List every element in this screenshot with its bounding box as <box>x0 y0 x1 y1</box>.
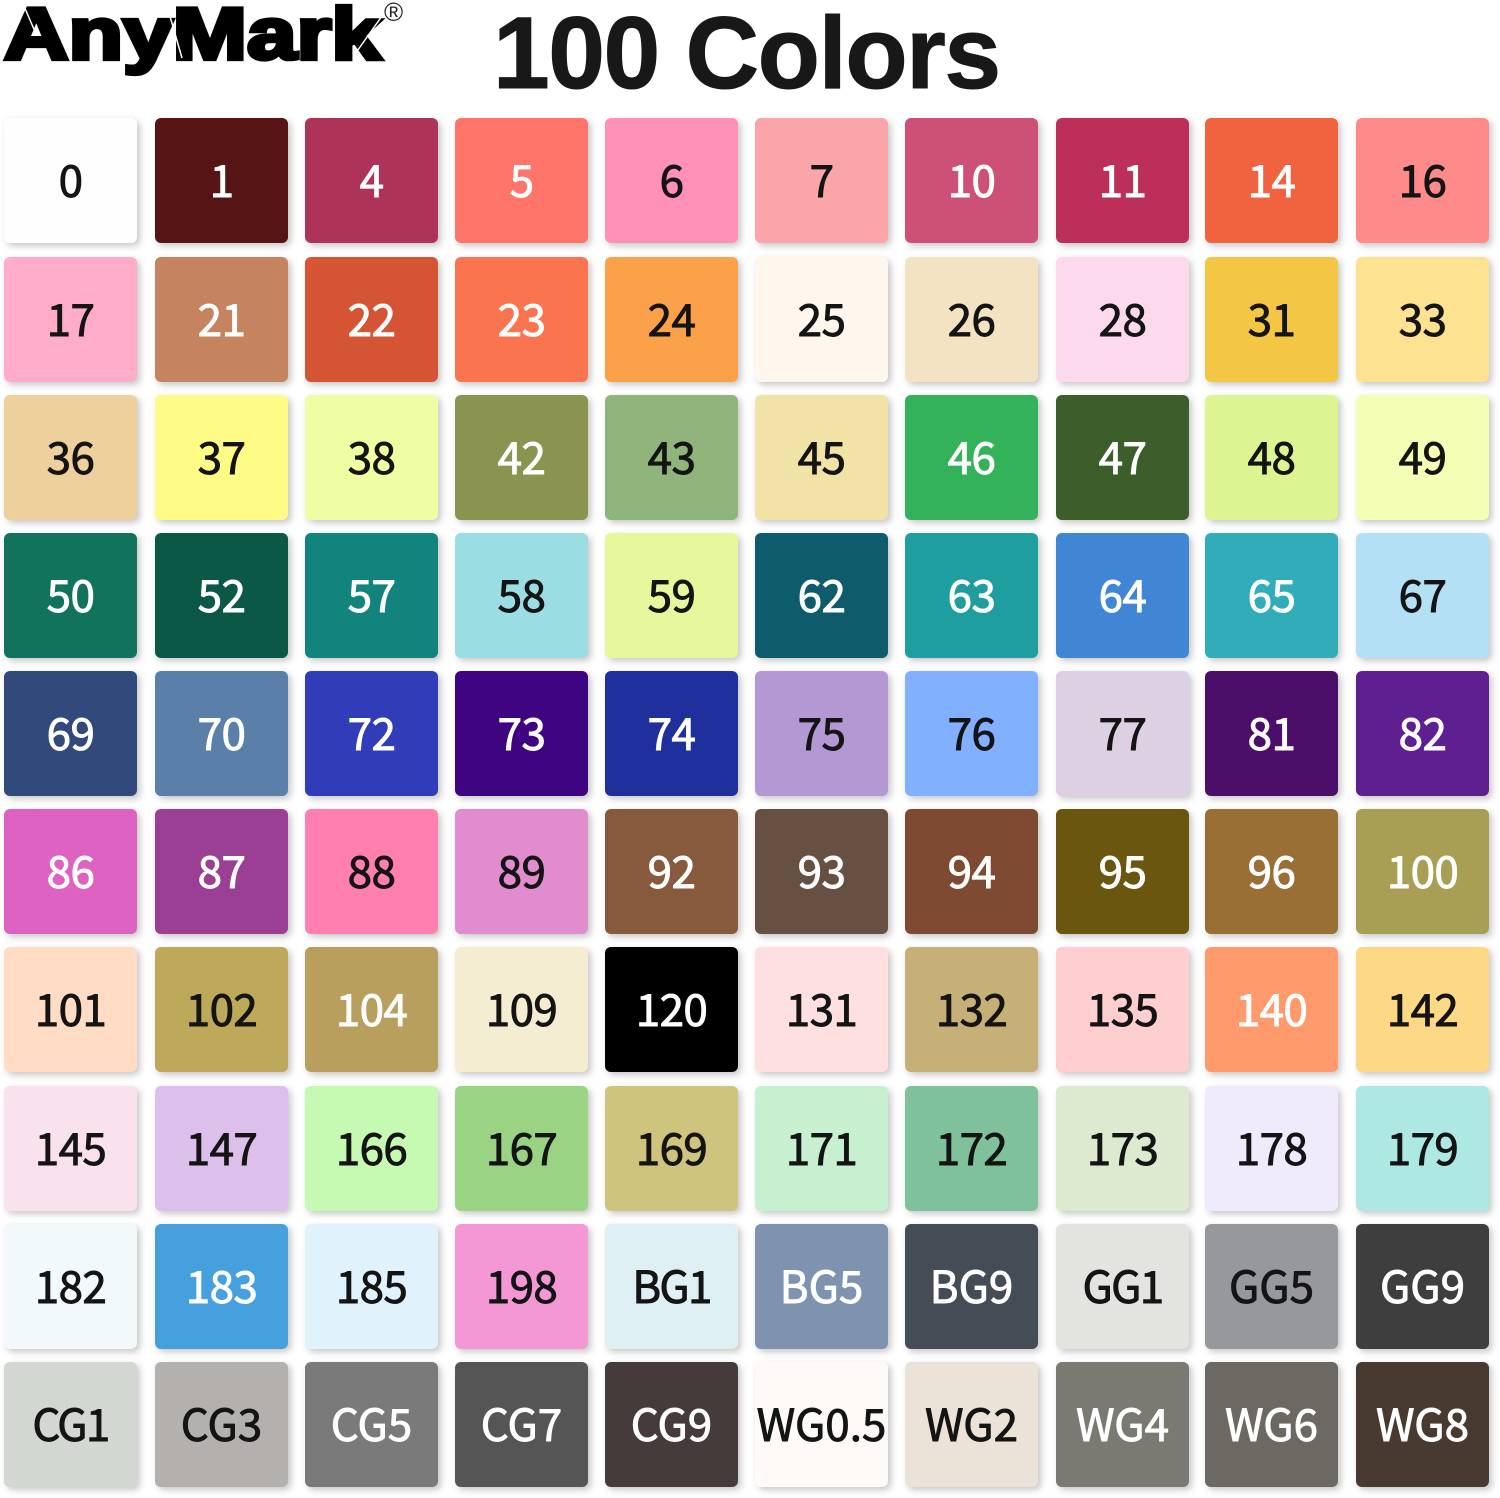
swatch 31 <box>1205 257 1338 382</box>
swatch 4: 4 <box>360 146 383 210</box>
swatch 14 <box>1205 118 1338 243</box>
swatch 69: 69 <box>47 699 94 763</box>
swatch 102 <box>155 947 288 1072</box>
swatch BG1 <box>605 1224 738 1349</box>
swatch 120 <box>605 947 738 1072</box>
swatch 49 <box>1356 395 1489 520</box>
swatch 24: 24 <box>648 285 695 349</box>
swatch 0: 0 <box>59 146 82 210</box>
swatch 132 <box>905 947 1038 1072</box>
swatch 104: 104 <box>336 975 407 1039</box>
swatch 131 <box>755 947 888 1072</box>
swatch 28 <box>1056 257 1189 382</box>
swatch 185 <box>305 1224 438 1349</box>
swatch 100 <box>1356 809 1489 934</box>
swatch 67 <box>1356 533 1489 658</box>
swatch 50: 50 <box>47 561 94 625</box>
swatch 65 <box>1205 533 1338 658</box>
swatch 46: 46 <box>948 423 995 487</box>
swatch 100: 100 <box>1387 837 1458 901</box>
swatch 95 <box>1056 809 1189 934</box>
swatch 86: 86 <box>47 837 94 901</box>
swatch 135 <box>1056 947 1189 1072</box>
swatch 179 <box>1356 1086 1489 1211</box>
swatch 169 <box>605 1086 738 1211</box>
swatch 22 <box>305 257 438 382</box>
swatch CG7 <box>455 1362 588 1487</box>
swatch CG9: CG9 <box>631 1390 712 1454</box>
swatch 93 <box>755 809 888 934</box>
swatch 65: 65 <box>1248 561 1295 625</box>
swatch 4 <box>305 118 438 243</box>
swatch 104 <box>305 947 438 1072</box>
swatch 37 <box>155 395 288 520</box>
swatch 58: 58 <box>498 561 545 625</box>
swatch 14: 14 <box>1248 146 1295 210</box>
swatch 88 <box>305 809 438 934</box>
swatch 23 <box>455 257 588 382</box>
swatch 140 <box>1205 947 1338 1072</box>
swatch 167 <box>455 1086 588 1211</box>
swatch 95: 95 <box>1099 837 1146 901</box>
swatch 1 <box>155 118 288 243</box>
swatch 10 <box>905 118 1038 243</box>
swatch 182: 182 <box>35 1252 106 1316</box>
swatch 96: 96 <box>1248 837 1295 901</box>
swatch 42: 42 <box>498 423 545 487</box>
swatch 59 <box>605 533 738 658</box>
swatch 76 <box>905 671 1038 796</box>
swatch 183: 183 <box>186 1252 257 1316</box>
swatch 142: 142 <box>1387 975 1458 1039</box>
swatch 67: 67 <box>1399 561 1446 625</box>
swatch 45: 45 <box>798 423 845 487</box>
swatch 145 <box>4 1086 137 1211</box>
swatch 183 <box>155 1224 288 1349</box>
swatch 173: 173 <box>1087 1114 1158 1178</box>
swatch 70 <box>155 671 288 796</box>
swatch 31: 31 <box>1248 285 1295 349</box>
swatch 52: 52 <box>198 561 245 625</box>
swatch 38 <box>305 395 438 520</box>
swatch 178: 178 <box>1236 1114 1307 1178</box>
swatch 17: 17 <box>47 285 94 349</box>
swatch BG5: BG5 <box>780 1252 863 1316</box>
swatch 75 <box>755 671 888 796</box>
swatch 47: 47 <box>1099 423 1146 487</box>
swatch 25: 25 <box>798 285 845 349</box>
swatch 28: 28 <box>1099 285 1146 349</box>
swatch WG8: WG8 <box>1376 1390 1469 1454</box>
swatch 182 <box>4 1224 137 1349</box>
swatch 92: 92 <box>648 837 695 901</box>
swatch 36 <box>4 395 137 520</box>
swatch 142 <box>1356 947 1489 1072</box>
swatch GG1 <box>1056 1224 1189 1349</box>
swatch 37: 37 <box>198 423 245 487</box>
swatch 72: 72 <box>348 699 395 763</box>
swatch BG9: BG9 <box>930 1252 1013 1316</box>
swatch 89: 89 <box>498 837 545 901</box>
swatch 179: 179 <box>1387 1114 1458 1178</box>
swatch 33: 33 <box>1399 285 1446 349</box>
swatch 171 <box>755 1086 888 1211</box>
swatch WG0.5 <box>755 1362 888 1487</box>
swatch WG2 <box>905 1362 1038 1487</box>
swatch 74: 74 <box>648 699 695 763</box>
swatch 43 <box>605 395 738 520</box>
swatch GG9: GG9 <box>1380 1252 1465 1316</box>
swatch GG5 <box>1205 1224 1338 1349</box>
swatch 64: 64 <box>1099 561 1146 625</box>
swatch 87: 87 <box>198 837 245 901</box>
swatch 185: 185 <box>336 1252 407 1316</box>
swatch 102: 102 <box>186 975 257 1039</box>
swatch CG5 <box>305 1362 438 1487</box>
swatch 94: 94 <box>948 837 995 901</box>
swatch 86 <box>4 809 137 934</box>
swatch 64 <box>1056 533 1189 658</box>
swatch 10: 10 <box>948 146 995 210</box>
swatch 72 <box>305 671 438 796</box>
swatch 6: 6 <box>660 146 683 210</box>
swatch 63: 63 <box>948 561 995 625</box>
swatch 52 <box>155 533 288 658</box>
swatch 43: 43 <box>648 423 695 487</box>
swatch CG3 <box>155 1362 288 1487</box>
swatch 166: 166 <box>336 1114 407 1178</box>
swatch 88: 88 <box>348 837 395 901</box>
swatch 42 <box>455 395 588 520</box>
swatch 36: 36 <box>47 423 94 487</box>
swatch 120: 120 <box>636 975 707 1039</box>
swatch 21: 21 <box>198 285 245 349</box>
swatch 47 <box>1056 395 1189 520</box>
swatch 74 <box>605 671 738 796</box>
swatch 109 <box>455 947 588 1072</box>
swatch 5 <box>455 118 588 243</box>
swatch 77: 77 <box>1099 699 1146 763</box>
swatch 145: 145 <box>35 1114 106 1178</box>
swatch 172 <box>905 1086 1038 1211</box>
swatch 140: 140 <box>1236 975 1307 1039</box>
swatch 17 <box>4 257 137 382</box>
swatch 22: 22 <box>348 285 395 349</box>
swatch 81 <box>1205 671 1338 796</box>
swatch 92 <box>605 809 738 934</box>
swatch 75: 75 <box>798 699 845 763</box>
swatch 11: 11 <box>1099 146 1146 210</box>
swatch 93: 93 <box>798 837 845 901</box>
swatch 48 <box>1205 395 1338 520</box>
swatch BG1: BG1 <box>632 1252 711 1316</box>
swatch WG8 <box>1356 1362 1489 1487</box>
swatch WG6: WG6 <box>1225 1390 1318 1454</box>
swatch 132: 132 <box>936 975 1007 1039</box>
swatch BG5 <box>755 1224 888 1349</box>
swatch 69 <box>4 671 137 796</box>
swatch 147: 147 <box>186 1114 257 1178</box>
swatch 26 <box>905 257 1038 382</box>
swatch 38: 38 <box>348 423 395 487</box>
swatch CG3: CG3 <box>181 1390 262 1454</box>
swatch CG9 <box>605 1362 738 1487</box>
swatch 62 <box>755 533 888 658</box>
swatch 81: 81 <box>1248 699 1295 763</box>
swatch 7: 7 <box>810 146 833 210</box>
swatch 58 <box>455 533 588 658</box>
swatch 6 <box>605 118 738 243</box>
swatch 49: 49 <box>1399 423 1446 487</box>
swatch WG4 <box>1056 1362 1189 1487</box>
swatch 16 <box>1356 118 1489 243</box>
swatch 16: 16 <box>1399 146 1446 210</box>
swatch 57 <box>305 533 438 658</box>
swatch 63 <box>905 533 1038 658</box>
swatch 48: 48 <box>1248 423 1295 487</box>
swatch 147 <box>155 1086 288 1211</box>
swatch 21 <box>155 257 288 382</box>
swatch 89 <box>455 809 588 934</box>
swatch 33 <box>1356 257 1489 382</box>
swatch 59: 59 <box>648 561 695 625</box>
swatch 11 <box>1056 118 1189 243</box>
swatch 87 <box>155 809 288 934</box>
swatch CG1: CG1 <box>32 1390 109 1454</box>
swatch 101: 101 <box>35 975 106 1039</box>
swatch 171: 171 <box>786 1114 857 1178</box>
swatch GG9 <box>1356 1224 1489 1349</box>
swatch 169: 169 <box>636 1114 707 1178</box>
swatch BG9 <box>905 1224 1038 1349</box>
swatch 25 <box>755 257 888 382</box>
swatch 5: 5 <box>510 146 533 210</box>
swatch 172: 172 <box>936 1114 1007 1178</box>
swatch 198: 198 <box>486 1252 557 1316</box>
swatch 94 <box>905 809 1038 934</box>
swatch GG5: GG5 <box>1229 1252 1314 1316</box>
swatch GG1: GG1 <box>1083 1252 1162 1316</box>
swatch 0 <box>4 118 137 243</box>
swatch 135: 135 <box>1087 975 1158 1039</box>
swatch 73: 73 <box>498 699 545 763</box>
swatch 50 <box>4 533 137 658</box>
swatch 26: 26 <box>948 285 995 349</box>
swatch 73 <box>455 671 588 796</box>
swatch 167: 167 <box>486 1114 557 1178</box>
swatch 23: 23 <box>498 285 545 349</box>
swatch 131: 131 <box>786 975 857 1039</box>
swatch 173 <box>1056 1086 1189 1211</box>
swatch WG2: WG2 <box>925 1390 1018 1454</box>
swatch CG1 <box>4 1362 137 1487</box>
swatch WG4: WG4 <box>1076 1390 1169 1454</box>
swatch 82 <box>1356 671 1489 796</box>
swatch 178 <box>1205 1086 1338 1211</box>
swatch 57: 57 <box>348 561 395 625</box>
swatch 70: 70 <box>198 699 245 763</box>
swatch WG6 <box>1205 1362 1338 1487</box>
swatch 7 <box>755 118 888 243</box>
swatch CG5: CG5 <box>331 1390 412 1454</box>
swatch WG0.5: WG0.5 <box>757 1390 886 1454</box>
swatch 45 <box>755 395 888 520</box>
swatch 101 <box>4 947 137 1072</box>
swatch 82: 82 <box>1399 699 1446 763</box>
swatch 96 <box>1205 809 1338 934</box>
swatch 62: 62 <box>798 561 845 625</box>
swatch 46 <box>905 395 1038 520</box>
swatch 166 <box>305 1086 438 1211</box>
swatch 1: 1 <box>210 146 233 210</box>
swatch 24 <box>605 257 738 382</box>
swatch 77 <box>1056 671 1189 796</box>
swatch 76: 76 <box>948 699 995 763</box>
swatch CG7: CG7 <box>481 1390 562 1454</box>
swatch 109: 109 <box>486 975 557 1039</box>
swatch 198 <box>455 1224 588 1349</box>
